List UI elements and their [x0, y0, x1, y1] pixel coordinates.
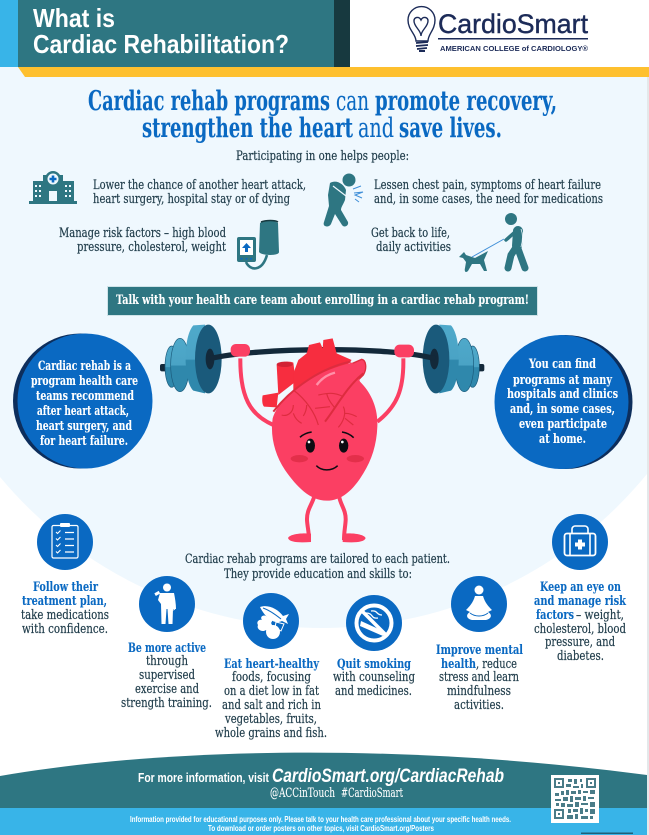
- panel: what cardiac rehab is: for heart failure.: [40, 434, 128, 449]
- headline: [88, 86, 557, 144]
- heart highlight: [317, 373, 335, 385]
- QR code: [551, 775, 599, 823]
- panel: what cardiac rehab is: program health care: [31, 374, 138, 389]
- headline: and: [358, 113, 394, 144]
- text: be more active: exercise and: [135, 682, 199, 697]
- text: manage risk factors: pressure, cholesterol, weight: [77, 240, 227, 255]
- text: lower the chance: [93, 178, 306, 207]
- callout banner: [108, 286, 538, 316]
- text: keep an eye on risk factors: factors: [536, 608, 574, 623]
- headline: strengthen the heart: [142, 113, 353, 144]
- footer: more information: #CardioSmart: [341, 786, 403, 801]
- title: What is: [33, 3, 115, 33]
- headline: save lives.: [399, 113, 502, 144]
- panel: where to find programs: even participate: [519, 417, 607, 432]
- text: improve mental health: , reduce: [476, 657, 517, 672]
- text: tailored programs intro: They provide education and skills to:: [224, 567, 412, 582]
- text: keep an eye on risk factors: [534, 580, 627, 664]
- title: [33, 3, 289, 59]
- heart vessels: [262, 338, 366, 407]
- arms: [240, 358, 403, 425]
- text: improve mental health: [436, 643, 523, 713]
- text: lower the chance: Lower the chance of another heart attack,: [93, 178, 306, 193]
- text: tailored programs intro: [185, 552, 450, 582]
- text: keep an eye on risk factors: cholesterol, blood: [534, 622, 626, 637]
- header band: [0, 0, 649, 77]
- icon: blood pressure monitor: [237, 220, 279, 268]
- text: eat heart-healthy: vegetables, fruits,: [224, 712, 317, 727]
- text: eat heart-healthy: [215, 657, 327, 741]
- logo: CardioSmart: AMERICAN COLLEGE of CARDIOLOGY®: [440, 44, 588, 53]
- text: eat heart-healthy: and salt and rich in: [222, 698, 321, 713]
- icon: no smoking: [346, 595, 402, 651]
- footer: disclaimer: Information provided for educational purposes only. Please talk to your health care professional about your specific health needs.: [130, 815, 511, 824]
- text: quit smoking: and medicines.: [335, 684, 412, 699]
- face: [291, 432, 364, 470]
- icon: person with chest pain coughing: [324, 174, 363, 226]
- text: get back to life: daily activities: [376, 240, 451, 255]
- text: eat heart-healthy: whole grains and fish.: [215, 726, 327, 741]
- legs and feet: [288, 497, 366, 542]
- text: improve mental health: activities.: [454, 698, 504, 713]
- text: be more active: strength training.: [121, 696, 212, 711]
- text: be more active: [121, 641, 212, 711]
- title: Cardiac Rehabilitation?: [33, 29, 289, 59]
- text: be more active: Be more active: [128, 641, 206, 656]
- icon: person exercising: [139, 576, 195, 632]
- logo: CardioSmart: [408, 7, 588, 53]
- icon: meditation: [451, 576, 507, 632]
- panel: where to find programs: programs at many: [513, 373, 612, 388]
- panel: what cardiac rehab is: Cardiac rehab is a: [38, 359, 131, 374]
- heart veins: [273, 362, 363, 427]
- panel: what cardiac rehab is: after heart attack,: [37, 404, 129, 419]
- icon: person walking dog: [459, 213, 525, 272]
- icon: first aid kit: [552, 514, 608, 570]
- text: quit smoking: Quit smoking: [337, 657, 411, 672]
- barbell: [160, 325, 484, 393]
- panel: what cardiac rehab is: [13, 334, 152, 468]
- footer: more information: [138, 766, 504, 801]
- text: lessen chest pain: [374, 178, 603, 207]
- illustration: heart lifting barbell: [160, 325, 484, 542]
- footer: disclaimer: [130, 815, 511, 833]
- text: eat heart-healthy: Eat heart-healthy: [224, 657, 319, 672]
- text: manage risk factors: [59, 226, 227, 255]
- panel: where to find programs: and, in some cases,: [510, 402, 615, 417]
- text: follow treatment plan: take medications: [21, 608, 109, 623]
- panel: what cardiac rehab is: heart surgery, and: [36, 419, 132, 434]
- text: eat heart-healthy: on a diet low in fat: [224, 684, 320, 699]
- panel: where to find programs: You can find: [528, 357, 596, 372]
- text: keep an eye on risk factors: diabetes.: [557, 649, 604, 664]
- icon: hospital: [29, 171, 77, 204]
- text: be more active: supervised: [139, 668, 195, 683]
- text: follow treatment plan: with confidence.: [22, 622, 108, 637]
- text: keep an eye on risk factors: – weight,: [576, 608, 624, 623]
- text: improve mental health: health: [441, 657, 476, 672]
- hands: [231, 344, 414, 357]
- footer band: [0, 753, 647, 835]
- text: follow treatment plan: Follow their: [33, 580, 98, 595]
- headline: can: [336, 86, 369, 117]
- text: follow treatment plan: treatment plan,: [22, 594, 107, 609]
- text: be more active: through: [146, 654, 188, 669]
- text: tailored programs intro: Cardiac rehab programs are tailored to each patient.: [185, 552, 450, 567]
- heart body: [272, 363, 377, 501]
- icon: fish and vegetables: [243, 593, 299, 649]
- footer: disclaimer: To download or order posters on other topics, visit CardioSmart.org/Posters: [208, 824, 434, 833]
- text: get back to life: Get back to life,: [371, 226, 450, 241]
- panel: where to find programs: at home.: [539, 432, 586, 447]
- panel: what cardiac rehab is: teams recommend: [36, 389, 134, 404]
- footer: more information: For more information, visit: [138, 770, 270, 785]
- text: improve mental health: stress and learn: [439, 670, 519, 685]
- headline: promote recovery,: [375, 86, 557, 117]
- icon: clipboard checklist: [37, 514, 93, 570]
- logo: CardioSmart: CardioSmart: [438, 9, 588, 39]
- text: manage risk factors: Manage risk factors – high blood: [59, 226, 226, 241]
- footer: more information: CardioSmart.org/CardiacRehab: [272, 766, 504, 787]
- text: quit smoking: [333, 657, 415, 699]
- text: quit smoking: with counseling: [333, 670, 415, 685]
- text: improve mental health: Improve mental: [436, 643, 523, 658]
- text: keep an eye on risk factors: pressure, and: [545, 635, 615, 650]
- headline: Cardiac rehab programs: [88, 86, 330, 117]
- intro line: Participating in one helps people:: [236, 149, 409, 164]
- text: get back to life: [371, 226, 451, 255]
- text: follow treatment plan: [21, 580, 109, 637]
- text: keep an eye on risk factors: Keep an eye on: [540, 580, 621, 595]
- panel: where to find programs: [494, 335, 632, 469]
- text: improve mental health: mindfulness: [447, 684, 511, 699]
- footer: more information: @ACCinTouch: [270, 786, 335, 801]
- text: lower the chance: heart surgery, hospital stay or of dying: [93, 192, 290, 207]
- text: eat heart-healthy: foods, focusing: [232, 670, 311, 685]
